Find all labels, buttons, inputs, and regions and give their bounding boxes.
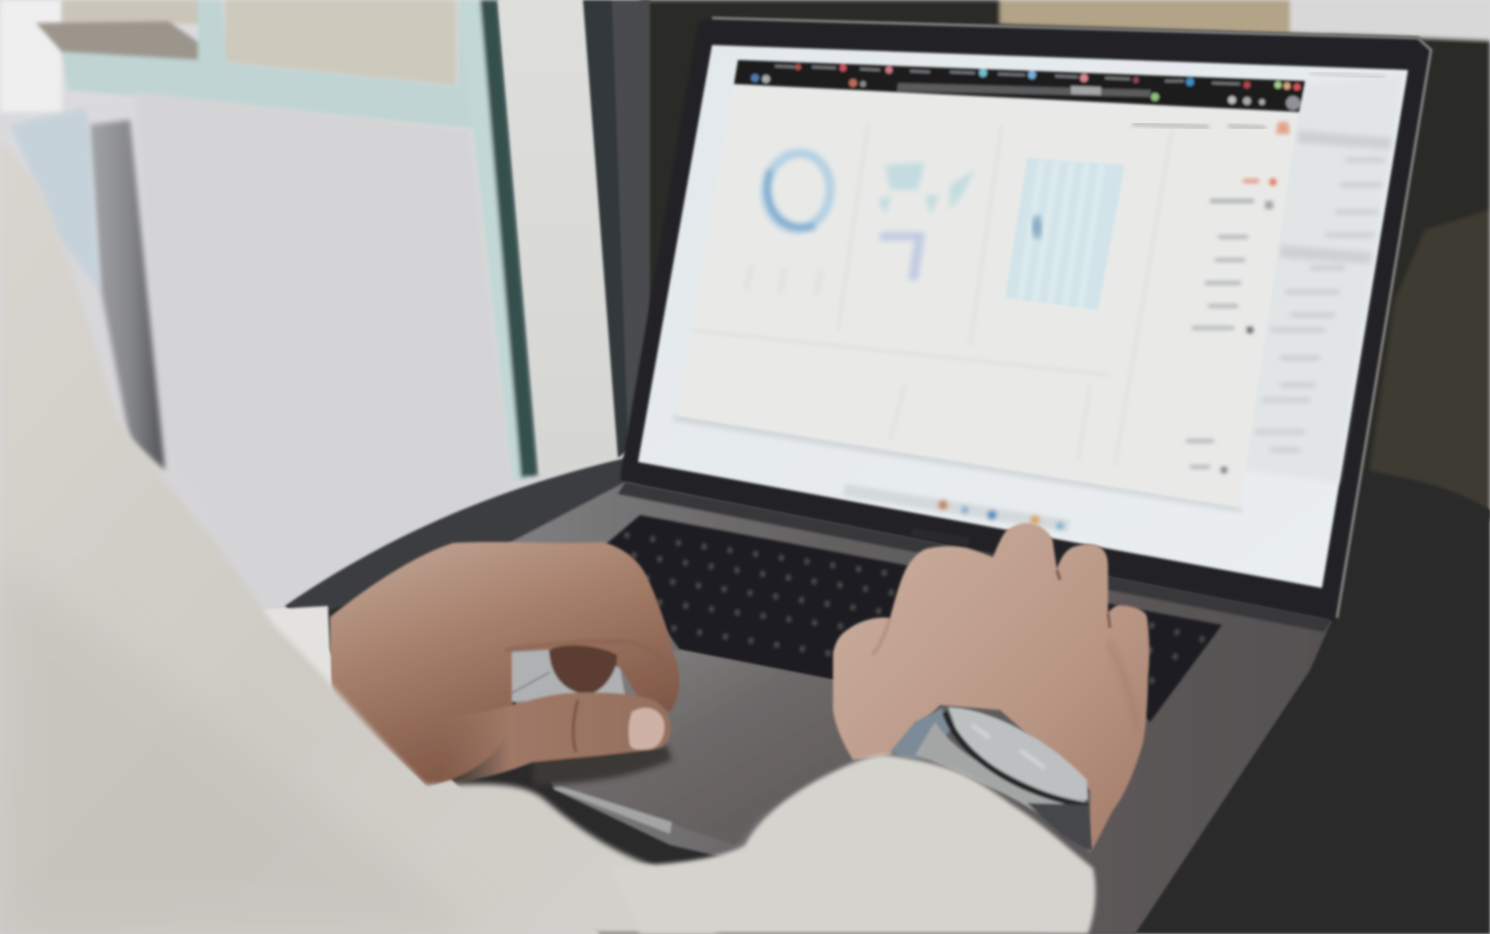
dark back room <box>640 0 1490 520</box>
white column <box>498 0 618 475</box>
trackpad <box>512 650 855 845</box>
sidebar text panel <box>1240 74 1403 483</box>
trackpad seam <box>512 672 550 693</box>
right pane icons <box>1186 122 1290 474</box>
laptop <box>505 17 1431 934</box>
dashboard window shadow <box>672 415 1243 512</box>
dark bezel arc <box>945 712 1088 806</box>
finger crease <box>505 642 665 668</box>
laptop brand label <box>911 528 970 546</box>
left arm sleeve <box>0 140 720 934</box>
screen edge highlight <box>712 18 1431 618</box>
chair back shadow <box>88 120 165 470</box>
shadow under thumb <box>533 745 672 785</box>
left strap <box>890 708 950 760</box>
screen bezel <box>620 17 1431 622</box>
sleeves <box>0 140 1095 934</box>
left hand <box>330 542 679 787</box>
wall panel <box>135 92 510 615</box>
front edge highlight <box>552 786 672 834</box>
screen <box>638 45 1408 588</box>
curled middle finger <box>549 645 617 694</box>
map chart <box>878 162 975 280</box>
thumb <box>440 693 671 785</box>
donut small bars <box>746 265 822 294</box>
donut chart <box>761 149 835 233</box>
chair left pale edge <box>10 108 100 290</box>
keyboard <box>605 515 1222 722</box>
thumbnail <box>629 708 664 750</box>
knuckle crease <box>573 700 578 752</box>
gap between fingers <box>512 650 625 702</box>
hinge strip <box>618 482 1332 632</box>
case side <box>915 722 1090 852</box>
dashboard toolbar <box>734 60 1305 112</box>
dashboard panel dividers <box>690 125 1172 465</box>
lower dark strap <box>1027 803 1092 852</box>
right hand <box>833 523 1149 853</box>
table <box>285 455 1490 934</box>
back of hand and index finger <box>330 542 679 787</box>
dial highlights <box>972 725 1045 768</box>
striped column chart <box>1005 158 1125 310</box>
dashboard window <box>676 62 1302 507</box>
dock <box>843 484 1070 532</box>
watch dial <box>948 707 1088 800</box>
sleeve shadow <box>0 560 480 934</box>
menu bar text <box>1310 73 1385 77</box>
laptop base <box>505 482 1332 934</box>
dark door frame <box>583 0 650 458</box>
dashboard header text <box>1132 124 1266 128</box>
white shirt cuff <box>252 606 332 700</box>
window frame, top left <box>36 0 538 480</box>
right arm sleeve <box>610 755 1095 934</box>
wristwatch <box>890 707 1092 852</box>
